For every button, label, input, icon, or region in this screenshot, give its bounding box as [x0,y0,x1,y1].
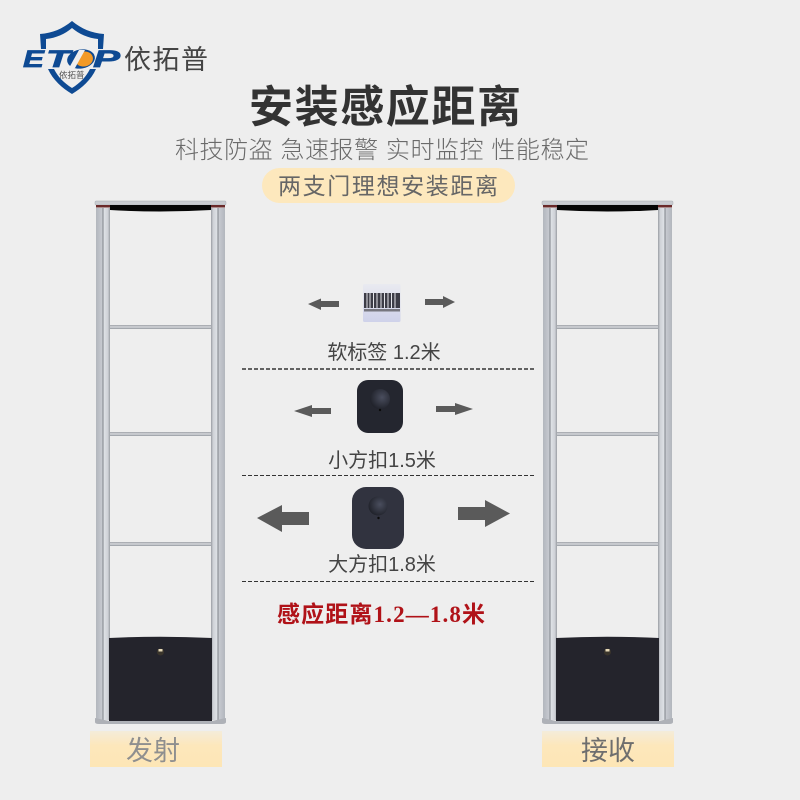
icon: shield [40,21,104,94]
logo wordmark ETOP: T [46,46,74,73]
right gate: receiver [542,201,673,724]
gate crossbars [110,325,211,546]
logo small chinese: 依拓普 [59,70,85,80]
text: soft label range: 软标签 1.2米 [327,341,441,364]
label: transmit [90,731,222,767]
arrow: soft label right [425,296,455,308]
gate top cap [95,201,226,212]
title: 安装感应距离 [249,83,521,132]
gate base [542,718,673,724]
text: large tag range: 大方扣1.8米 [328,553,436,576]
gate top cap [542,201,673,212]
logo wordmark ETOP: P [93,46,122,73]
divider 1 [242,368,534,370]
divider 3 [242,580,534,582]
left gate: transmitter [95,201,226,724]
gate base [95,718,226,724]
label: transmit: 发射 [126,736,180,766]
icon: small square tag [357,380,403,433]
logo wordmark ETOP: E [23,46,45,73]
icon: soft label sticker [363,284,400,322]
arrow: large tag left [257,505,309,532]
pill heading: 两支门理想安装距离 [278,173,498,199]
arrow: soft label left [308,298,339,310]
logo [23,21,208,94]
divider 2 [242,474,534,476]
arrow: large tag right [458,500,510,527]
arrow: small tag left [294,405,331,417]
logo chinese name: 依拓普 [124,45,208,75]
gate crossbars [557,325,658,546]
subtitle: 科技防盗 急速报警 实时监控 性能稳定 [175,137,589,164]
pill heading [262,168,515,203]
gate posts [96,208,225,720]
gate cabinet [109,637,212,721]
gate cabinet [556,637,659,721]
label: receive [542,731,674,767]
label: receive: 接收 [581,736,635,766]
text: sensing distance: 感应距离1.2—1.8米 [277,601,485,627]
logo wordmark ETOP [23,46,122,73]
gate posts [543,208,672,720]
arrow: small tag right [436,403,473,415]
text: small tag range: 小方扣1.5米 [328,449,436,472]
icon: large square tag [352,487,404,549]
